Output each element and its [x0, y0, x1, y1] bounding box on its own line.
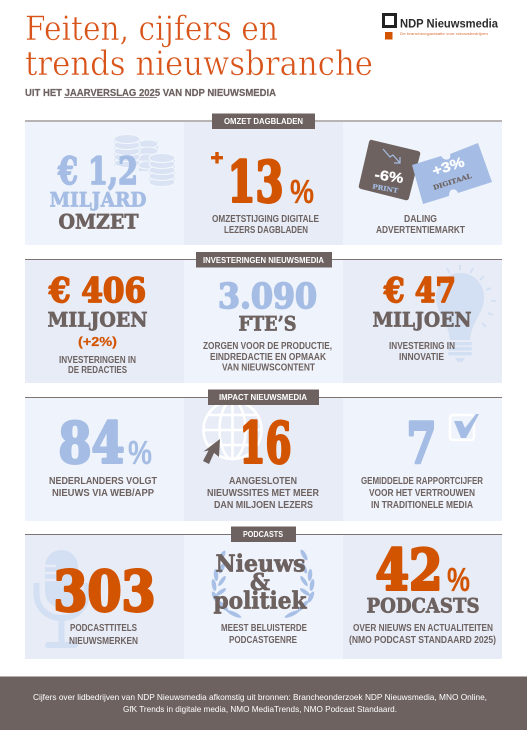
label: innovatie — [389, 341, 455, 363]
title — [25, 9, 373, 83]
panel: omzet dagbladen — [25, 114, 502, 245]
label: rapportcijfer: GEMIDDELDE RAPPORTCIJFER — [361, 476, 484, 487]
section tag: podcasts — [231, 526, 296, 542]
subtitle: UIT HET JAARVERSLAG 2025 VAN NDP NIEUWSMEDIA — [25, 88, 276, 99]
icon: print ticket: -6% — [374, 166, 405, 186]
label: fte: ZORGEN VOOR DE PRODUCTIE, — [203, 341, 332, 352]
stat: 303: 303 — [54, 558, 156, 624]
stat: 1,2 miljard omzet: € 1,2 — [57, 149, 138, 193]
panel: podcasts — [25, 526, 502, 659]
section tag: podcasts: PODCASTS — [243, 529, 283, 539]
icon: microphone — [36, 550, 86, 648]
stat: 406 miljoen: € 406 — [48, 271, 146, 310]
label: advertentiemarkt: ADVERTENTIEMARKT — [376, 225, 465, 236]
label: nieuws en actualiteiten — [349, 623, 496, 646]
icon: cursor — [203, 439, 220, 464]
label: podcasttitels: NIEUWSMERKEN — [69, 636, 138, 647]
stat: 84%: % — [128, 434, 152, 471]
label: nieuwssites: DAN MILJOEN LEZERS — [214, 500, 313, 511]
stat: 3.090 fte — [218, 277, 317, 336]
label: omzetstijging: OMZETSTIJGING DIGITALE — [212, 214, 319, 225]
icon: digital ticket: +3% — [430, 153, 467, 179]
label: advertentiemarkt: DALING — [404, 214, 437, 225]
section tag: investeringen nieuwsmedia — [196, 252, 332, 268]
label: innovatie: INNOVATIE — [399, 352, 444, 363]
panel: investeringen nieuwsmedia — [25, 252, 502, 383]
label: podcastgenre: MEEST BELUISTERDE — [221, 623, 307, 634]
stat: 42% podcasts: % — [447, 561, 470, 598]
icon: digital ticket — [412, 143, 492, 204]
label: nieuws en actualiteiten: (NMO PODCAST STANDAARD 2025) — [349, 635, 496, 646]
footer: GfK Trends in digitale media, NMO MediaTrends, NMO Podcast Standaard. — [123, 704, 397, 714]
label: fte: VAN NIEUWSCONTENT — [222, 362, 315, 374]
section tag: impact nieuwsmedia — [208, 390, 319, 405]
logo: NDP Nieuwsmedia — [384, 14, 499, 40]
icon: print ticket — [359, 140, 420, 200]
label: podcastgenre — [221, 623, 307, 646]
stat: 3.090 fte: 3.090 — [218, 277, 317, 317]
stat: 7: 7 — [406, 410, 436, 476]
stat: nieuws en politiek: Nieuws — [216, 550, 306, 578]
label: web/app: NIEUWS VIA WEB/APP — [52, 488, 154, 499]
stat: 406 miljoen: (+2%) — [78, 335, 117, 349]
icon: print ticket: PRINT — [372, 183, 399, 195]
icon: globe — [204, 401, 262, 459]
icon: checkbox — [450, 414, 479, 440]
label: rapportcijfer: VOOR HET VERTROUWEN — [369, 488, 475, 499]
stat: 84%: 84 — [58, 410, 124, 476]
logo: NDP Nieuwsmedia: De brancheorganisatie voor nieuwsbedrijven — [400, 31, 488, 36]
footer — [0, 676, 527, 730]
label: nieuws en actualiteiten: OVER NIEUWS EN ACTUALITEITEN — [353, 623, 493, 634]
label: omzetstijging: LEZERS DAGBLADEN — [224, 225, 308, 236]
label: nieuwssites — [207, 476, 320, 511]
label: investeringen redacties: INVESTERINGEN IN — [59, 355, 136, 366]
stat: nieuws en politiek: & — [250, 569, 270, 596]
stat: nieuws en politiek: politiek — [214, 588, 308, 614]
stat: 42% podcasts: 42 — [376, 538, 442, 604]
section tag: omzet dagbladen: OMZET DAGBLADEN — [224, 116, 303, 126]
label: web/app — [49, 476, 157, 499]
label: investeringen redacties — [59, 355, 136, 376]
label: fte: EINDREDACTIE EN OPMAAK — [210, 352, 327, 363]
stat: 47 miljoen: MILJOEN — [372, 308, 472, 332]
label: advertentiemarkt — [376, 214, 465, 236]
stat: nieuws en politiek — [214, 550, 308, 614]
label: innovatie: INVESTERING IN — [389, 341, 455, 352]
label: nieuwssites: NIEUWSSITES MET MEER — [207, 488, 320, 499]
icon: light bulb — [436, 265, 496, 362]
section tag: omzet dagbladen — [212, 114, 315, 129]
stat: 42% podcasts: PODCASTS — [366, 594, 480, 618]
stat: 47 miljoen: € 47 — [383, 271, 456, 310]
label: nieuwssites: AANGESLOTEN — [229, 476, 297, 487]
label: web/app: NEDERLANDERS VOLGT — [49, 476, 157, 487]
label: podcastgenre: PODCASTGENRE — [229, 635, 297, 646]
label: omzetstijging — [212, 214, 319, 236]
label: rapportcijfer — [361, 476, 484, 511]
label: rapportcijfer: IN TRADITIONELE MEDIA — [371, 500, 473, 511]
panel: impact nieuwsmedia — [25, 390, 502, 521]
logo: NDP Nieuwsmedia: NDP Nieuwsmedia — [400, 18, 499, 30]
title: trends nieuwsbranche — [25, 44, 373, 83]
stat: 42% podcasts — [366, 538, 480, 618]
stat: 1,2 miljard omzet: MILJARD — [50, 188, 146, 212]
stat: 16: 16 — [240, 410, 292, 476]
stat: 1,2 miljard omzet: OMZET — [58, 210, 139, 234]
stat: 406 miljoen — [48, 271, 148, 349]
label: podcasttitels — [69, 623, 138, 647]
stat: 406 miljoen: MILJOEN — [48, 308, 148, 332]
icon: coins — [114, 134, 175, 186]
stat: +13%: 13 — [228, 150, 284, 216]
title: Feiten, cijfers en — [25, 9, 278, 48]
footer: Cijfers over lidbedrijven van NDP Nieuwsmedia afkomstig uit bronnen: Brancheonderzoek NDP Nieuwsmedia, MNO Online, — [33, 692, 487, 702]
label: investeringen redacties: DE REDACTIES — [68, 365, 127, 376]
stat: +13%: % — [290, 173, 314, 210]
stat: 3.090 fte: FTE’S — [238, 312, 296, 336]
label: podcasttitels: PODCASTTITELS — [70, 623, 137, 634]
stat: 47 miljoen — [372, 271, 472, 332]
section tag: impact nieuwsmedia: IMPACT NIEUWSMEDIA — [219, 392, 307, 402]
label: fte — [203, 341, 332, 374]
icon: digital ticket: DIGITAAL — [432, 172, 473, 192]
icon: laurel wreath — [210, 549, 316, 619]
section tag: investeringen nieuwsmedia: INVESTERINGEN NIEUWSMEDIA — [203, 255, 324, 265]
stat: 1,2 miljard omzet — [50, 149, 146, 234]
